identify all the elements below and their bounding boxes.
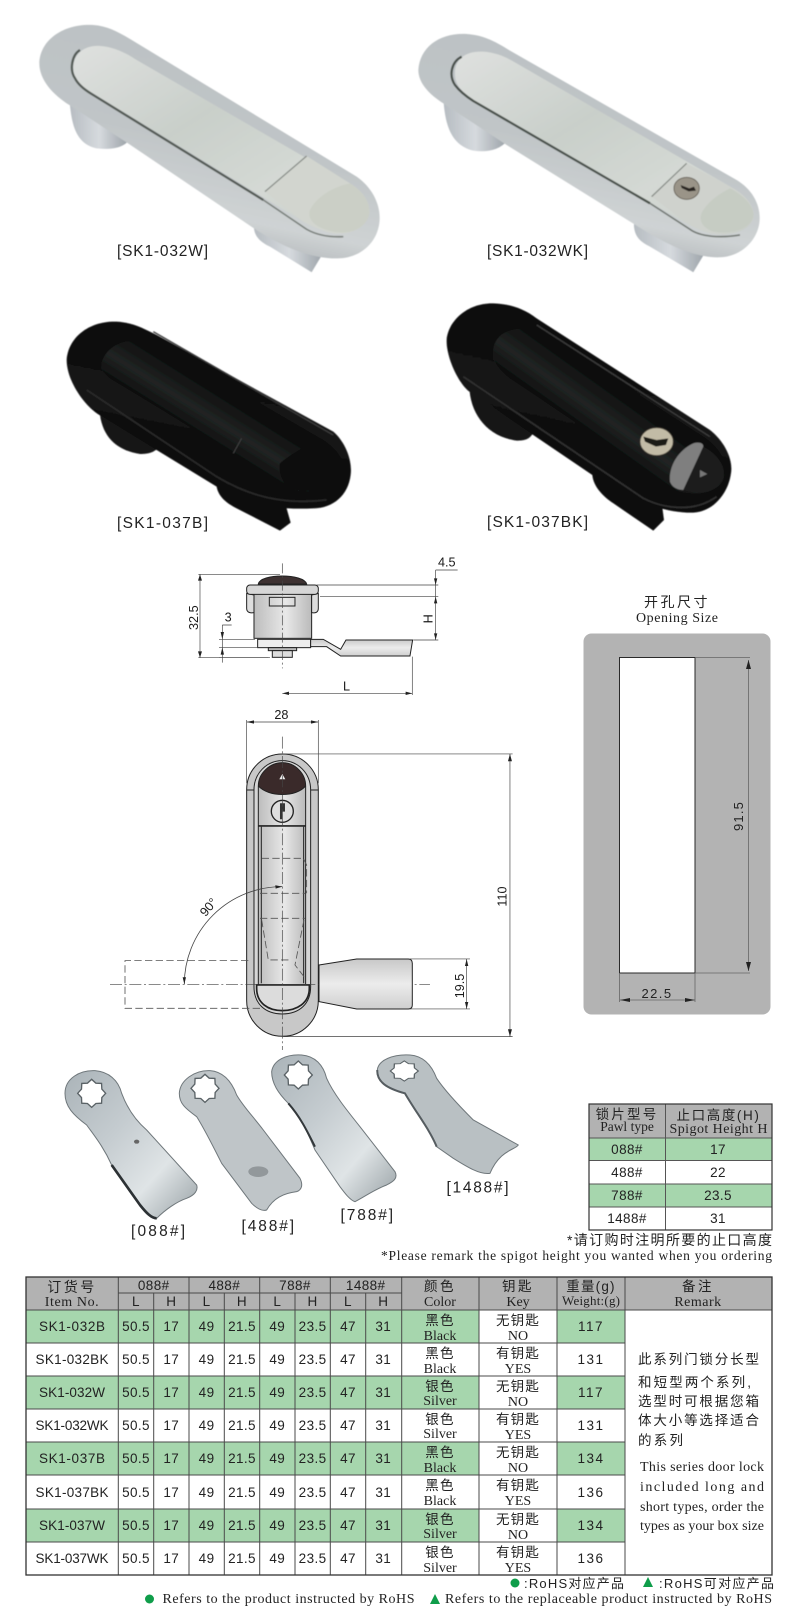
row SK1-037BK: YES [505,1494,531,1509]
row SK1-032BK: SK1-032BK [36,1352,108,1367]
row SK1-032W: 117 [578,1385,604,1400]
row SK1-037W: Silver [423,1527,457,1542]
row SK1-032WK: 47 [340,1418,356,1433]
table header: 重量(g) [566,1279,616,1294]
pawl table header: Pawl type [600,1119,654,1134]
pawl table header: Spigot Height H [670,1122,768,1137]
pawl 1488 [377,1055,518,1174]
table header: 备注 [682,1278,714,1294]
pawl table rows: 1488# [607,1211,647,1226]
row SK1-032BK: 131 [577,1352,605,1367]
table header: H [308,1294,318,1309]
table header: H [237,1294,247,1309]
remark text: included long and [640,1480,764,1495]
legend: RoHS: :RoHS可对应产品 [659,1576,774,1591]
dim 110: 110 [496,886,510,907]
dim 90 degrees: 90° [197,896,220,919]
rotation arc [184,887,282,984]
label: SK1-032WK: [SK1-032WK] [487,243,588,260]
row SK1-032W: 31 [375,1385,391,1400]
row SK1-037B: 49 [199,1451,215,1466]
table header: L [203,1294,211,1309]
row SK1-037W: SK1-037W [39,1518,105,1533]
row SK1-032W: 49 [199,1385,215,1400]
side view of lock [247,576,413,657]
legend: RoHS: :RoHS对应产品 [524,1576,624,1591]
table header: 颜色 [424,1278,456,1294]
row SK1-037WK [36,1544,605,1576]
pawl front view [319,959,412,1009]
dim 3: 3 [225,610,232,624]
table header: Key [506,1295,530,1310]
side view centre line [281,563,283,668]
row SK1-037WK: 49 [269,1551,285,1566]
row SK1-032BK: 23.5 [299,1352,327,1367]
pawl 488 [179,1071,302,1210]
row SK1-037BK [36,1477,605,1509]
legend: RoHS: Refers to the replaceable product instructed by RoHS [445,1592,772,1607]
row SK1-037W: 31 [375,1518,391,1533]
row SK1-032WK: SK1-032WK [36,1418,108,1433]
row SK1-037W: 134 [577,1518,605,1533]
row SK1-032WK: 50.5 [122,1418,150,1433]
product photo: SK1-037BK black lock with key [447,303,731,531]
row SK1-037WK: 银色 [425,1544,455,1560]
row SK1-032BK: 49 [269,1352,285,1367]
row SK1-032B: 无钥匙 [496,1313,540,1328]
row SK1-037B: 黑色 [425,1444,455,1460]
dim 19.5: 19.5 [453,974,467,998]
panel: opening size [584,594,770,1014]
row SK1-037WK: 21.5 [228,1551,256,1566]
row SK1-032B: 23.5 [299,1319,327,1334]
remark text: types as your box size [640,1519,764,1534]
row SK1-037BK: 17 [163,1485,179,1500]
row SK1-032BK: 17 [163,1352,179,1367]
table header: Weight:(g) [562,1293,620,1308]
row SK1-037BK: 黑色 [425,1477,455,1493]
row SK1-032B: 21.5 [228,1319,256,1334]
row SK1-037W: 无钥匙 [496,1512,540,1527]
table header: 788# [279,1278,311,1293]
row SK1-037W: 49 [199,1518,215,1533]
table header: 订货号 [47,1279,97,1295]
table header: L [273,1294,281,1309]
row SK1-037WK: 23.5 [299,1551,327,1566]
row SK1-032B: SK1-032B [39,1319,105,1334]
row SK1-032WK: 31 [375,1418,391,1433]
row SK1-032W: 银色 [425,1378,455,1394]
heading: opening size: Opening Size [636,611,718,626]
icon: RoHS circle english [145,1594,154,1604]
row SK1-032WK: 49 [199,1418,215,1433]
row SK1-032W [39,1378,604,1410]
row SK1-032BK: 49 [199,1352,215,1367]
legend: RoHS [145,1576,774,1607]
table: pawl type and spigot height [589,1104,772,1230]
label: 788#: [788#] [340,1207,393,1224]
row SK1-032B: NO [508,1329,528,1344]
remark text: short types, order the [640,1500,764,1515]
row SK1-037WK: 50.5 [122,1551,150,1566]
row SK1-037B: 无钥匙 [496,1445,540,1460]
table header: 488# [208,1278,240,1293]
pawl table rows: 088# [611,1142,643,1157]
row SK1-037WK: 31 [375,1551,391,1566]
row SK1-032B: 黑色 [425,1312,455,1328]
row SK1-037W: 50.5 [122,1518,150,1533]
table header: Remark [674,1295,722,1310]
row SK1-037W: 47 [340,1518,356,1533]
remark text: 体大小等选择适合 [638,1412,760,1428]
note: spigot height [381,1232,772,1263]
row SK1-037BK: Black [424,1494,456,1509]
table header: Item No. [45,1295,99,1310]
remark text: This series door lock [640,1460,764,1475]
product photo: SK1-037B black lock [67,322,351,531]
row SK1-037B: SK1-037B [39,1451,105,1466]
label: SK1-032W: [SK1-032W] [117,243,208,260]
row SK1-032WK [36,1411,605,1443]
row SK1-032W: 50.5 [122,1385,150,1400]
icon: RoHS circle [510,1578,520,1588]
row SK1-037W [39,1511,605,1543]
row SK1-032BK: 31 [375,1352,391,1367]
row SK1-037WK: 47 [340,1551,356,1566]
pawl table rows [607,1142,732,1226]
row SK1-037BK: 21.5 [228,1485,256,1500]
row SK1-032WK: 23.5 [299,1418,327,1433]
row SK1-032W: 17 [163,1385,179,1400]
icon: RoHS triangle [643,1577,653,1587]
row SK1-032WK: 有钥匙 [496,1412,540,1427]
centre lines [110,737,430,1050]
row SK1-032WK: YES [505,1428,531,1443]
row SK1-032WK: 17 [163,1418,179,1433]
row SK1-032W: NO [508,1395,528,1410]
front view dimension arrows [183,720,512,1037]
row SK1-032WK: 49 [269,1418,285,1433]
row SK1-032WK: Silver [423,1427,457,1442]
row SK1-032W: Silver [423,1394,457,1409]
row SK1-032B: 49 [269,1319,285,1334]
table header [45,1278,722,1310]
pawl table header: 止口高度(H) [677,1107,760,1123]
row SK1-032BK: 50.5 [122,1352,150,1367]
pawl 088 [65,1071,197,1218]
dim H: H [422,614,436,623]
dim L: L [343,680,350,694]
pawl photos [65,1055,518,1218]
dim 22.5: 22.5 [642,986,672,1001]
row SK1-037WK: 136 [577,1551,605,1566]
product photo: SK1-032W silver lock [39,25,380,272]
row SK1-037W: NO [508,1528,528,1543]
row SK1-037BK: SK1-037BK [36,1485,108,1500]
table header: L [132,1294,140,1309]
table header: H [166,1294,176,1309]
table header: 088# [138,1278,170,1293]
table header: 钥匙 [502,1279,534,1294]
row SK1-032W: 49 [269,1385,285,1400]
pawl table rows: 23.5 [704,1188,732,1203]
label: 488#: [488#] [242,1218,294,1235]
row SK1-037B: 21.5 [228,1451,256,1466]
row SK1-032B: 49 [199,1319,215,1334]
table: item specifications [26,1277,772,1576]
row SK1-037WK: 49 [199,1551,215,1566]
row SK1-037B: NO [508,1461,528,1476]
table header: H [378,1294,388,1309]
row SK1-032BK: YES [505,1362,531,1377]
row SK1-032B: 31 [375,1319,391,1334]
row SK1-037BK: 49 [269,1485,285,1500]
icon: RoHS triangle english [430,1594,440,1604]
label: SK1-037B: [SK1-037B] [117,515,208,532]
table header: L [344,1294,352,1309]
pawl table rows: 22 [710,1165,726,1180]
remark text: 选型时可根据您箱 [638,1393,759,1409]
label: SK1-037BK: [SK1-037BK] [487,514,588,531]
pawl table rows: 31 [710,1211,726,1226]
remark text [638,1352,764,1534]
row SK1-032BK: 有钥匙 [496,1346,540,1361]
row SK1-032BK: 47 [340,1352,356,1367]
dim 32.5: 32.5 [187,605,201,630]
row SK1-032W: SK1-032W [39,1385,105,1400]
row SK1-032B: 117 [578,1319,604,1334]
legend: RoHS: Refers to the product instructed by RoHS [162,1592,414,1607]
heading: opening size: 开孔尺寸 [644,594,710,610]
row SK1-032B: 17 [163,1319,179,1334]
remark text: 的系列 [638,1433,683,1448]
row SK1-037WK: 17 [163,1551,179,1566]
row SK1-037B: 134 [577,1451,605,1466]
pawl table header [596,1107,768,1137]
label: 1488#: [1488#] [446,1180,508,1196]
row SK1-032BK: 黑色 [425,1345,455,1361]
row SK1-037WK: SK1-037WK [36,1551,108,1566]
pawl table rows: 488# [611,1165,643,1180]
front view dimensions [247,720,513,1037]
row SK1-032W: 23.5 [299,1385,327,1400]
row SK1-037BK: 49 [199,1485,215,1500]
remark text: 和短型两个系列, [638,1375,751,1390]
row SK1-032WK: 银色 [425,1411,455,1427]
row SK1-037WK: Silver [423,1561,457,1576]
side view dimensions [198,570,458,695]
row SK1-037B: 49 [269,1451,285,1466]
dim 28: 28 [274,708,288,722]
row SK1-037W: 23.5 [299,1518,327,1533]
row SK1-032B: Black [424,1329,456,1344]
row SK1-032BK [36,1345,605,1377]
note: spigot height: *请订购时注明所要的止口高度 [567,1232,772,1248]
pawl table rows: 788# [611,1188,643,1203]
row SK1-037BK: 47 [340,1485,356,1500]
row SK1-037WK: 有钥匙 [496,1545,540,1560]
hidden pawl outline [125,858,307,1008]
label: 088#: [088#] [131,1223,185,1240]
row SK1-037W: 21.5 [228,1518,256,1533]
note: spigot height: *Please remark the spigot height you wanted when you ordering [381,1248,772,1263]
row SK1-032W: 无钥匙 [496,1379,540,1394]
heading: opening size [636,594,718,626]
table header: 1488# [346,1278,386,1293]
row SK1-032B: 50.5 [122,1319,150,1334]
row SK1-037B: 23.5 [299,1451,327,1466]
row SK1-032BK: 21.5 [228,1352,256,1367]
pawl table rows: 17 [710,1142,726,1157]
row SK1-032WK: 21.5 [228,1418,256,1433]
row SK1-037B: Black [424,1461,456,1476]
row SK1-037BK: 23.5 [299,1485,327,1500]
dim 4.5: 4.5 [438,556,456,570]
row SK1-037BK: 136 [577,1485,605,1500]
row SK1-037W: 17 [163,1518,179,1533]
row SK1-037B: 50.5 [122,1451,150,1466]
row SK1-032BK: Black [424,1362,456,1377]
product photo: SK1-032WK silver lock with key [418,34,760,272]
row SK1-037W: 银色 [425,1511,455,1527]
remark text: 此系列门锁分长型 [638,1352,759,1367]
row SK1-037BK: 50.5 [122,1485,150,1500]
row SK1-037B [39,1444,605,1476]
row SK1-037B: 17 [163,1451,179,1466]
row SK1-037W: 49 [269,1518,285,1533]
row SK1-032W: 21.5 [228,1385,256,1400]
row SK1-032B [39,1312,604,1344]
table backgrounds [26,1277,772,1542]
row SK1-037WK: YES [505,1561,531,1576]
table header: Color [424,1295,456,1310]
front view of lock [247,754,318,1036]
row SK1-037BK: 31 [375,1485,391,1500]
row SK1-037B: 47 [340,1451,356,1466]
pawl table header: 锁片型号 [596,1107,658,1122]
pawl 788 [272,1055,396,1202]
row SK1-032W: 47 [340,1385,356,1400]
row SK1-032WK: 131 [577,1418,605,1433]
dim 91.5: 91.5 [731,801,746,831]
row SK1-037BK: 有钥匙 [496,1478,540,1493]
row SK1-032B: 47 [340,1319,356,1334]
row SK1-037B: 31 [375,1451,391,1466]
side view dimension arrows [198,574,437,695]
technical drawing: side and front views [110,556,513,1050]
